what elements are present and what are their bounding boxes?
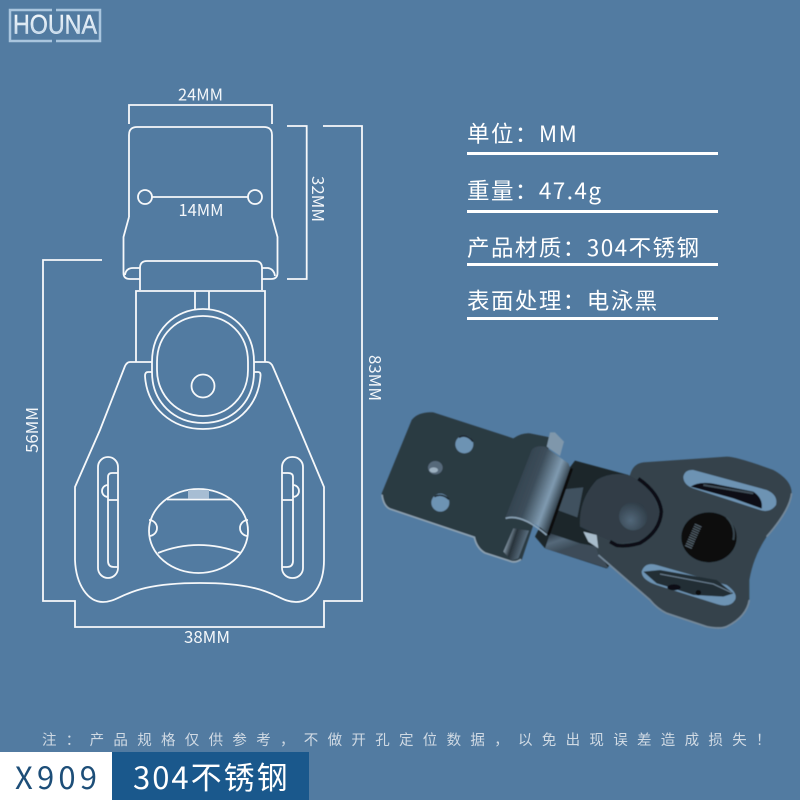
cam disc bbox=[580, 474, 658, 543]
spec: surface finish bbox=[467, 285, 718, 320]
dimension labels: 83MM bbox=[364, 355, 388, 401]
rotating cam rings bbox=[145, 309, 261, 429]
footnote: 注：产品规格仅供参考，不做开孔定位数据，以免出现误差造成损失！ bbox=[42, 729, 780, 750]
right part of latch bbox=[535, 457, 792, 628]
top slot bbox=[683, 470, 776, 511]
spec: weight bbox=[467, 175, 718, 213]
dimension labels bbox=[19, 82, 388, 648]
technical drawing with dimensions bbox=[19, 82, 388, 648]
mounting holes with 14MM line bbox=[138, 190, 262, 204]
dimension lines bbox=[43, 105, 362, 627]
bottom slot bbox=[642, 564, 736, 605]
spec: material: 产品材质：304不锈钢 bbox=[467, 231, 700, 263]
hinge block bbox=[535, 461, 643, 568]
round window bbox=[681, 512, 737, 562]
dimension labels: 56MM bbox=[19, 407, 43, 453]
shiny cam edge bbox=[583, 532, 598, 548]
left mounting plate bbox=[382, 412, 550, 562]
dimension labels: 38MM bbox=[184, 624, 230, 648]
upper plate outline bbox=[124, 127, 278, 279]
hinge block and stem bbox=[136, 291, 265, 362]
lower plate outline bbox=[75, 362, 324, 602]
spec: surface finish: 表面处理：电泳黑 bbox=[467, 284, 659, 316]
hinge sleeve bbox=[505, 446, 572, 535]
left part of latch bbox=[382, 412, 564, 562]
hinge pin ends bbox=[503, 432, 564, 561]
dimension labels: 14MM bbox=[178, 197, 224, 221]
holes and dimple bbox=[428, 435, 473, 512]
center oval window bbox=[149, 489, 248, 573]
spec: unit: 单位：MM bbox=[467, 117, 578, 149]
logo: HOUNA: HOUNA bbox=[13, 10, 97, 40]
latch plate bbox=[593, 457, 792, 628]
spec: weight: 重量：47.4g bbox=[467, 174, 603, 206]
left slot bbox=[98, 457, 118, 578]
dimension labels: 24MM bbox=[178, 82, 223, 106]
material badge: 304不锈钢 bbox=[133, 753, 290, 798]
dimension labels: 32MM bbox=[307, 176, 331, 222]
right slot bbox=[282, 457, 303, 578]
spec: unit bbox=[467, 118, 718, 155]
model number badge: X909 bbox=[15, 753, 101, 798]
rivet bbox=[619, 502, 648, 530]
hinge bar and ears bbox=[125, 261, 275, 290]
